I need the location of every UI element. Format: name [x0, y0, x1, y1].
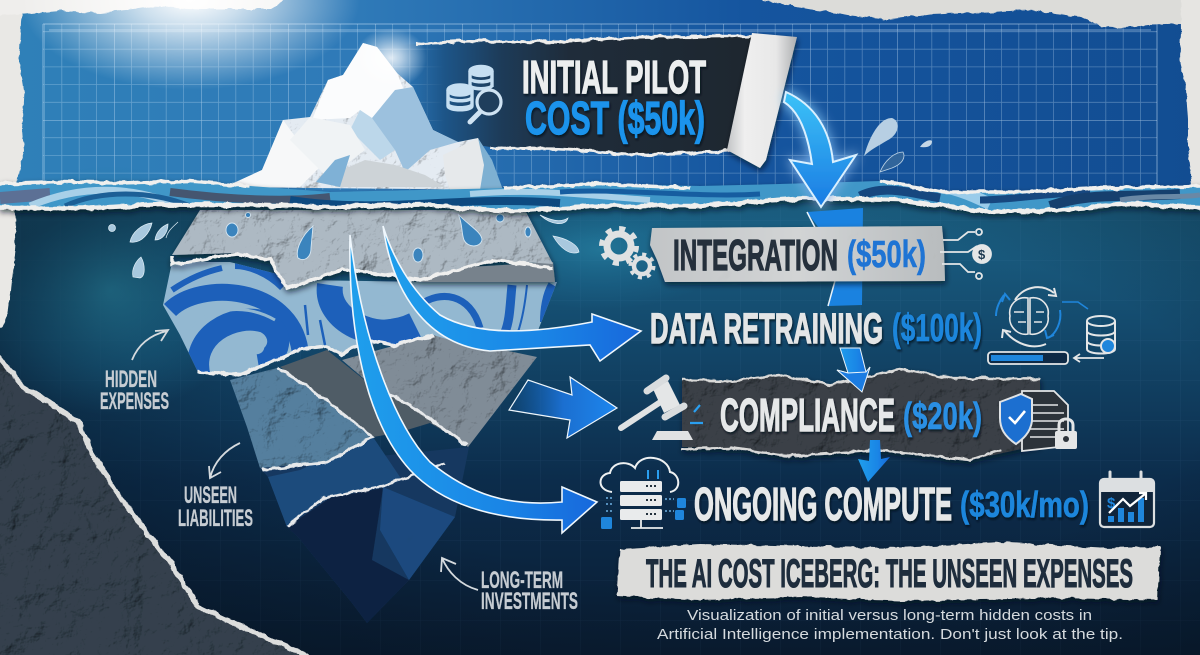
annotation: hidden expenses: EXPENSES [100, 388, 169, 415]
icon: calendar with rising chart [1100, 472, 1154, 527]
annotation: long-term investments: INVESTMENTS [481, 588, 578, 615]
iceberg above water [225, 28, 503, 190]
arrow: long strand to data retraining [383, 226, 641, 361]
iceberg silhouette [225, 43, 503, 190]
dark lower folds [287, 488, 409, 623]
value: $100k: ($100k) [892, 307, 982, 350]
title strip [617, 542, 1160, 601]
icon: progress bar [988, 352, 1104, 364]
icon: water drops right [540, 215, 579, 253]
label: integration: INTEGRATION [673, 231, 838, 280]
icon: calendar with rising chart: $ [1107, 495, 1116, 512]
heading: cost: COST ($50k) [525, 92, 705, 144]
dark grey layer [280, 350, 467, 445]
annotation: unseen liabilities: LIABILITIES [178, 505, 253, 532]
annotation: unseen liabilities [178, 443, 253, 532]
step: data retraining [650, 287, 1115, 364]
arrow: to compliance from iceberg [509, 377, 617, 438]
caption: Artificial Intelligence implementation. Don't just look at the tip. [657, 626, 1123, 643]
icon: data stack with dollar [1087, 316, 1115, 354]
arrow: long strand to ongoing compute [350, 235, 597, 533]
icon: coins and magnifier [448, 66, 501, 122]
glare on tip [355, 28, 427, 88]
icon: brain retraining cycle [996, 287, 1088, 346]
banner paper [650, 226, 945, 282]
band bottom torn edge [0, 198, 1200, 212]
title paper [617, 542, 1160, 601]
label: data retraining: DATA RETRAINING [650, 305, 883, 353]
blueprint grid [43, 24, 1157, 190]
value: $50k: ($50k) [847, 234, 926, 276]
label: compliance: COMPLIANCE [720, 389, 895, 441]
dark crumpled paper corner [0, 345, 320, 655]
torn paper border: right strip [1180, 0, 1200, 190]
swirl paper layer [163, 262, 557, 378]
blue arrow from roll [784, 92, 856, 207]
torn paper border: top left strip [0, 0, 320, 16]
icon: circuit with dollar: $ [978, 247, 986, 262]
caption [657, 607, 1123, 643]
annotation: hidden expenses [100, 330, 169, 415]
icon: gavel [621, 378, 703, 440]
annotation: long-term investments [441, 558, 578, 615]
arrow tip overlap [837, 367, 870, 392]
icon: cloud servers [600, 458, 686, 529]
grey top layer [172, 210, 555, 288]
torn paper border: top right [745, 0, 1200, 28]
crumpled grey layer [342, 335, 537, 447]
sun glare [20, 0, 360, 90]
annotation: long-term investments: LONG-TERM [481, 567, 563, 594]
step: compliance [621, 367, 1077, 460]
background: deep water [0, 165, 1200, 655]
step: integration [602, 226, 991, 282]
navy base layer [260, 447, 469, 623]
label: ongoing compute: ONGOING COMPUTE [694, 478, 952, 530]
arrow: down to compliance [837, 348, 870, 392]
icon: document, shield and lock [1000, 391, 1077, 451]
water band [0, 178, 1200, 218]
torn paper border: left strip [0, 0, 25, 345]
icon: water drops left [108, 222, 178, 278]
value: $30k/mo: ($30k/mo) [960, 484, 1089, 525]
navy right facet [380, 487, 455, 580]
iceberg facets [225, 43, 503, 190]
band top torn edge [0, 181, 1200, 192]
top banner: initial pilot cost [400, 33, 797, 168]
blue-grey torn piece [230, 368, 373, 468]
annotation: unseen liabilities: UNSEEN [184, 482, 237, 509]
water drops on iceberg [226, 212, 531, 262]
step: ongoing compute [600, 458, 1154, 530]
banner paper [682, 369, 1040, 460]
banner paper [400, 36, 755, 155]
heading: initial pilot: INITIAL PILOT [522, 51, 706, 103]
paper roll [727, 33, 797, 168]
value: $20k: ($20k) [903, 396, 982, 438]
caption: Visualization of initial versus long-term hidden costs in [687, 607, 1092, 624]
arrow: down to ongoing compute [858, 440, 890, 482]
background: sky blueprint [0, 0, 1200, 215]
icon: circuit with dollar [940, 229, 991, 279]
blue arrow stream: down behind integration [807, 208, 863, 306]
iceberg underwater layers [163, 210, 641, 623]
paper splash drops [864, 118, 932, 172]
annotation: hidden expenses: HIDDEN [105, 366, 157, 393]
navy band torn edge [268, 437, 402, 527]
icon: gears [602, 229, 654, 278]
